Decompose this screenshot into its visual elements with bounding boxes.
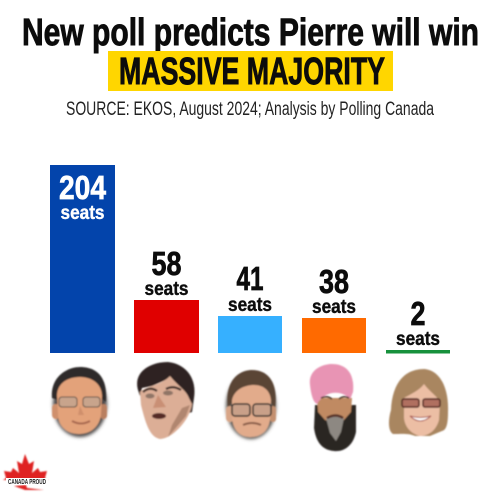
bar: 41 seats: 41	[236, 260, 264, 297]
bar: 38 seats: 38	[319, 263, 349, 300]
bar chart	[50, 165, 450, 354]
bar: 204 seats	[50, 165, 115, 353]
bar: 204 seats: 204	[59, 169, 107, 206]
bar: 204 seats: seats	[60, 203, 104, 224]
bar: 38 seats	[302, 263, 366, 353]
bar: 41 seats: seats	[228, 295, 272, 316]
icon: leader 5 face	[389, 369, 448, 436]
logo: Canada Proud: CANADA PROUD	[8, 479, 46, 486]
bar: 2 seats: 2	[410, 295, 426, 332]
highlighted heading: MASSIVE MAJORITY	[119, 51, 385, 93]
bar: 2 seats: seats	[396, 329, 440, 350]
icon: leader 1 face	[52, 367, 107, 437]
bar: 2 seats	[386, 295, 450, 354]
bar: 58 seats: seats	[144, 279, 188, 300]
bar: 41 seats	[218, 260, 282, 353]
bar: 38 seats: seats	[312, 297, 356, 318]
icon: leader 3 face	[226, 370, 276, 439]
logo label	[6, 478, 48, 485]
bar: 58 seats: 58	[152, 245, 182, 282]
logo: Canada Proud	[3, 454, 48, 490]
icon: leader 2 face	[137, 362, 194, 439]
icon: leader 4 face	[310, 364, 356, 451]
icon: maple leaf	[3, 454, 48, 490]
bar: 58 seats	[134, 245, 199, 353]
